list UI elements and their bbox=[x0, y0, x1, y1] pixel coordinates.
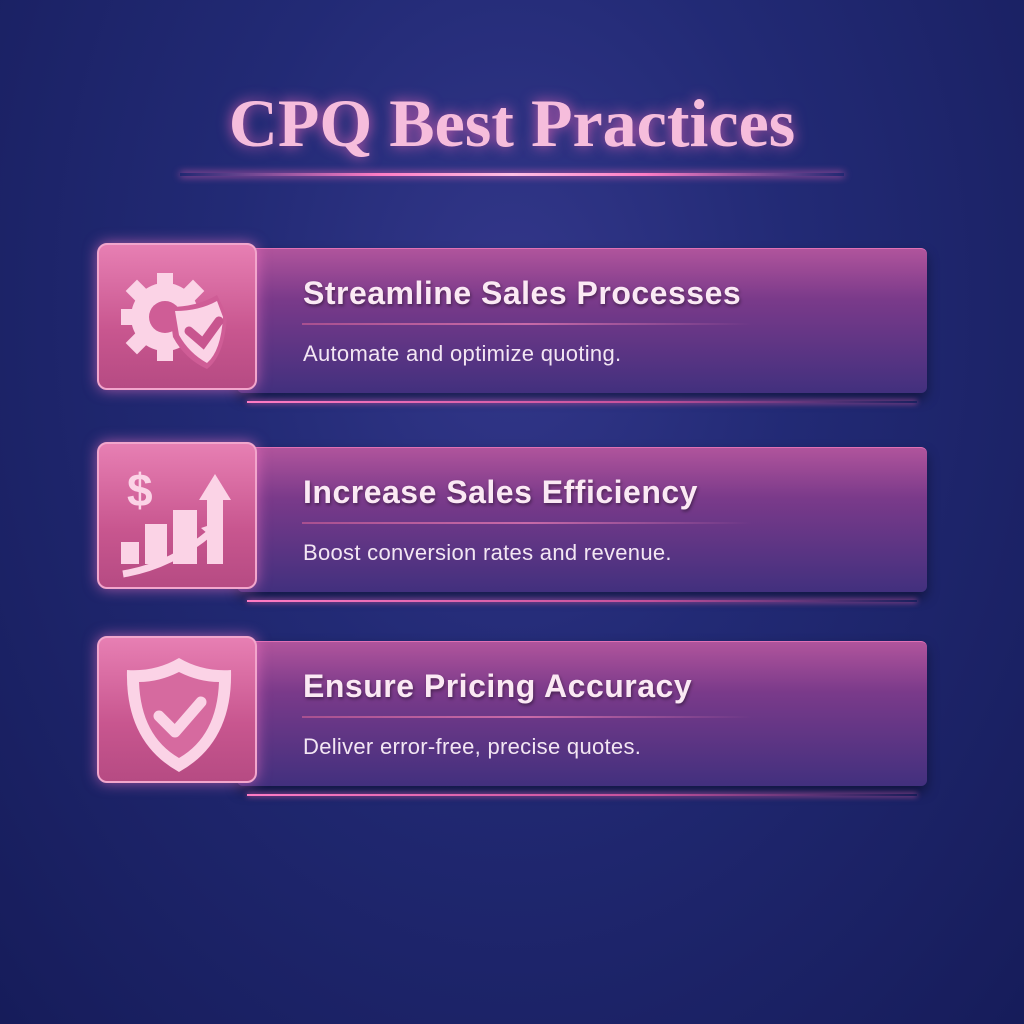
card: streamline sales processes bbox=[87, 233, 932, 408]
card: ensure pricing accuracy bbox=[87, 626, 932, 800]
text: Automate and optimize quoting. bbox=[303, 341, 621, 366]
card: increase sales efficiency bbox=[87, 432, 932, 606]
heading: Streamline Sales Processes bbox=[303, 275, 741, 311]
heading: Increase Sales Efficiency bbox=[303, 474, 698, 510]
icon: dollar chart arrow: $ bbox=[127, 464, 153, 516]
title: CPQ Best Practices bbox=[229, 85, 795, 161]
icon: gear with shield bbox=[97, 243, 257, 390]
text: Deliver error-free, precise quotes. bbox=[303, 734, 641, 759]
icon: dollar chart arrow bbox=[97, 442, 257, 589]
heading: Ensure Pricing Accuracy bbox=[303, 668, 692, 704]
text: Boost conversion rates and revenue. bbox=[303, 540, 672, 565]
icon: shield check bbox=[97, 636, 257, 783]
